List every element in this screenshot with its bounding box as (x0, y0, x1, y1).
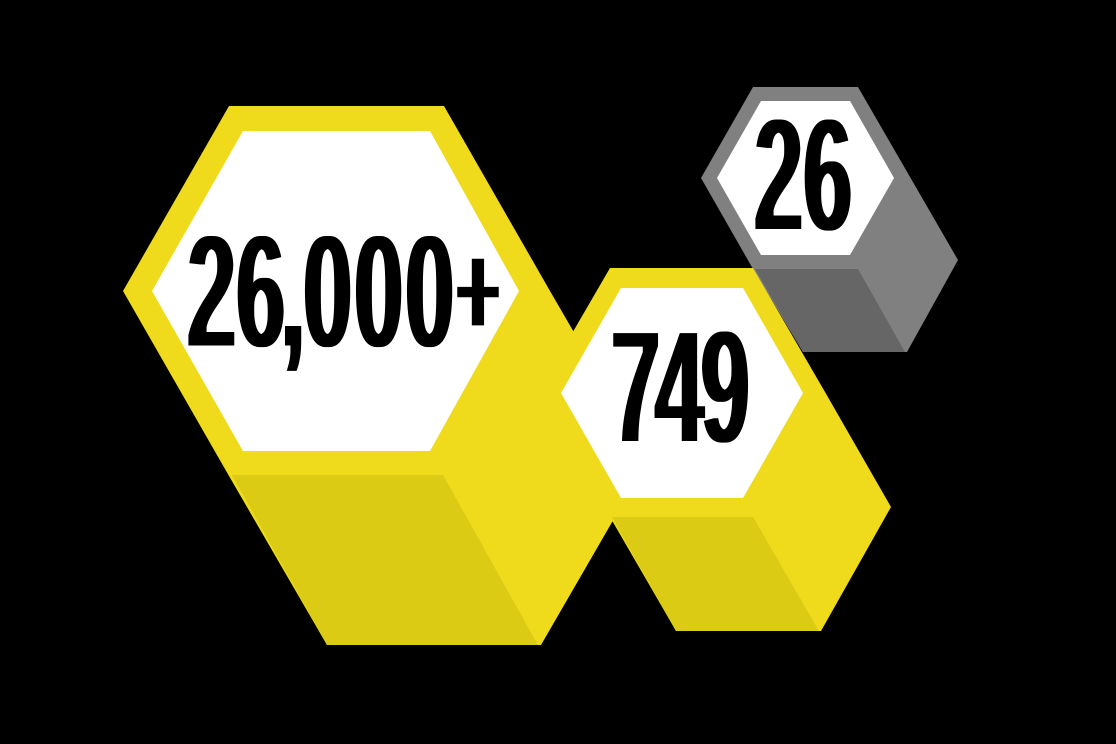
number 26,000+: 26,000 (187, 199, 454, 383)
grey hexagon white face (717, 101, 894, 255)
number 26: 26 (754, 83, 852, 266)
medium prism body (538, 268, 891, 631)
hexagon prism: 26 (grey) (701, 83, 958, 352)
grey prism body (701, 87, 958, 352)
medium hexagon white face (561, 288, 803, 498)
grey prism shaded face (755, 269, 905, 352)
number 26,000+: + (456, 212, 500, 369)
hexagon prism: 749 (medium yellow) (538, 268, 891, 631)
hexagon prism: 26,000+ (large yellow) (123, 106, 648, 645)
number 749: 749 (612, 295, 749, 478)
large prism shaded face (232, 475, 538, 645)
large prism body (123, 106, 648, 645)
medium prism shaded face (612, 517, 819, 631)
large hexagon white face (152, 131, 519, 451)
